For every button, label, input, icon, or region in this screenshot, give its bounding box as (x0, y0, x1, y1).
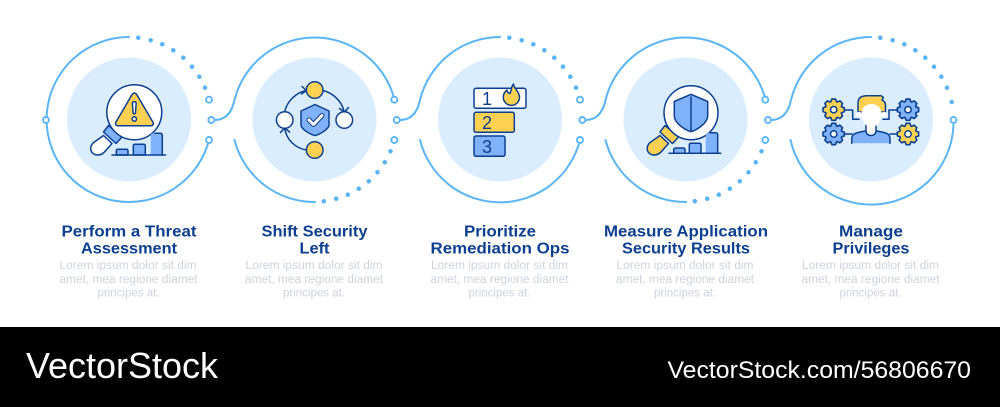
heading: measure application security results: Measure Application (604, 224, 768, 240)
step 5 dotted arc (880, 38, 952, 102)
body copy: amet, mea regione diamet (802, 274, 940, 286)
body copy: Lorem ipsum dolor sit dim (431, 260, 568, 272)
text block: step 2 (245, 224, 384, 300)
step 5 connector and top arc (771, 37, 871, 120)
body copy: amet, mea regione diamet (245, 274, 384, 286)
heading: measure application security results (604, 224, 768, 258)
body copy: Lorem ipsum dolor sit dim (60, 260, 196, 272)
step 4 background disc (624, 58, 748, 182)
heading: shift security left (262, 224, 368, 258)
step 5 background disc (809, 58, 933, 182)
body copy (60, 260, 198, 300)
icon: ranked priority list with flame: 3 (482, 137, 492, 157)
panel: step 2 shift security left (214, 38, 400, 202)
step 1 ring arc (47, 37, 209, 202)
body copy: principes at. (283, 288, 345, 300)
body copy: principes at. (654, 288, 716, 300)
text block: step 3 (430, 224, 570, 300)
step 3 dotted arc (509, 38, 576, 88)
icon: magnifier with warning triangle and bars (91, 85, 166, 155)
step 2 connector and top arc (214, 38, 394, 120)
step 2 dotted arc (324, 151, 390, 201)
icon: person connected to four gears (823, 96, 919, 145)
body copy: Lorem ipsum dolor sit dim (616, 260, 754, 272)
body copy: amet, mea regione diamet (616, 274, 755, 286)
step 3 ring nodes (577, 97, 585, 143)
body copy: Lorem ipsum dolor sit dim (802, 260, 939, 272)
step 4 bottom arc (606, 140, 686, 202)
heading: perform a threat assessment (62, 224, 196, 258)
heading: shift security left: Shift Security (262, 224, 368, 240)
step 4 dotted arc (695, 151, 762, 201)
panel: step 5 manage privileges (771, 37, 956, 205)
step 3 background disc (438, 58, 562, 182)
text block: step 1 (60, 224, 198, 300)
heading: manage privileges (832, 224, 910, 258)
step 4 ring nodes (762, 97, 771, 143)
heading: prioritize remediation ops: Remediation Ops (430, 240, 570, 258)
step 5 bottom arc (790, 120, 954, 205)
body copy: Lorem ipsum dolor sit dim (246, 260, 382, 272)
step 5 ring nodes (950, 117, 956, 123)
step 3 connector and top arc (400, 37, 500, 120)
step 3 bottom arc (420, 140, 580, 202)
footer image url: VectorStock.com/56806670 (668, 357, 971, 384)
heading: prioritize remediation ops (430, 224, 570, 258)
step 2 background disc (252, 58, 376, 182)
icon: shield with security cycle (276, 82, 353, 158)
body copy (802, 260, 940, 300)
body copy (616, 260, 755, 300)
heading: manage privileges: Manage (839, 224, 903, 240)
heading: shift security left: Left (300, 240, 330, 258)
heading: prioritize remediation ops: Prioritize (464, 224, 536, 240)
panel: step 1 perform a threat assessment (43, 37, 214, 202)
body copy (430, 260, 569, 300)
heading: perform a threat assessment: Assessment (81, 240, 177, 258)
footer brand name: VectorStock (26, 345, 219, 386)
step 4 connector and top arc (586, 38, 766, 120)
icon: ranked priority list with flame (474, 84, 526, 157)
step 2 bottom arc (234, 140, 315, 202)
icon: ranked priority list with flame: 2 (482, 113, 492, 133)
body copy: principes at. (468, 288, 530, 300)
body copy: principes at. (98, 288, 160, 300)
text block: step 4 (604, 224, 768, 300)
step 1 background disc (67, 58, 191, 182)
heading: perform a threat assessment: Perform a Threat (62, 224, 196, 240)
panel: step 3 prioritize remediation ops (400, 37, 585, 202)
body copy: amet, mea regione diamet (430, 274, 569, 286)
icon: ranked priority list with flame: 1 (482, 89, 492, 109)
heading: manage privileges: Privileges (832, 240, 910, 258)
footer bar with watermark (0, 327, 1000, 407)
heading: measure application security results: Security Results (622, 240, 750, 258)
text block: step 5 (802, 224, 940, 300)
step 1 ring nodes (43, 97, 214, 143)
icon: magnifier with shield and bars (647, 86, 721, 155)
step 1 dotted arc (138, 38, 205, 88)
step 2 ring nodes (391, 97, 400, 143)
body copy: amet, mea regione diamet (60, 274, 198, 286)
body copy (245, 260, 384, 300)
body copy: principes at. (840, 288, 902, 300)
panel: step 4 measure application security results (586, 38, 771, 202)
